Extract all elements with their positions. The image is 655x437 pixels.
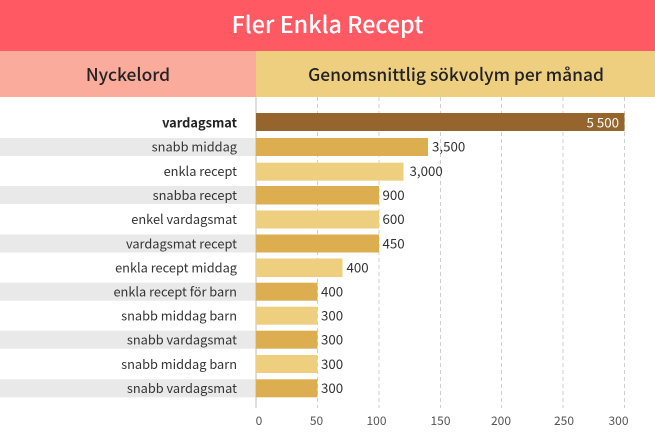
keyword labels: snabb vardagsmat xyxy=(127,378,237,397)
bar chart xyxy=(256,113,624,397)
column header: Genomsnittlig sökvolym per månad xyxy=(256,51,655,97)
column header: Nyckelord: Nyckelord xyxy=(86,62,170,87)
keyword labels: snabba recept xyxy=(153,185,237,204)
value labels: 5 500 xyxy=(586,112,619,132)
x-axis tick labels: 50 xyxy=(310,412,323,429)
keyword labels: snabb vardagsmat xyxy=(127,330,237,348)
keyword labels: snabb middag barn xyxy=(121,354,237,373)
value labels: 400 xyxy=(321,282,343,300)
value labels: 300 xyxy=(321,330,343,348)
value labels: 400 xyxy=(346,258,369,276)
x-axis tick labels: 200 xyxy=(491,412,511,429)
keyword row stripes xyxy=(0,138,256,397)
value labels: 450 xyxy=(382,234,405,252)
title banner xyxy=(0,0,655,51)
chart axis line xyxy=(255,97,257,408)
x-axis tick labels: 250 xyxy=(554,412,574,429)
value labels: 300 xyxy=(321,354,343,373)
x-axis tick labels: 100 xyxy=(367,412,387,429)
keyword labels: enkla recept middag xyxy=(115,258,238,276)
keyword labels: enkla recept xyxy=(164,161,237,180)
x-axis tick labels xyxy=(256,412,629,429)
value labels xyxy=(321,112,619,397)
value labels: 3,000 xyxy=(410,161,443,180)
value labels: 300 xyxy=(321,306,343,324)
value labels: 600 xyxy=(382,209,405,228)
keyword labels: snabb middag barn xyxy=(121,306,237,324)
x-axis tick labels: 300 xyxy=(609,412,629,429)
column header: Nyckelord xyxy=(0,51,256,97)
keyword labels: enkla recept för barn xyxy=(113,282,237,300)
keyword labels: vardagsmat recept xyxy=(126,234,237,252)
keyword labels: enkel vardagsmat xyxy=(131,209,237,228)
keyword labels xyxy=(113,112,238,397)
x-axis tick labels: 150 xyxy=(431,412,451,429)
value labels: 900 xyxy=(382,185,405,204)
x-axis tick labels: 0 xyxy=(256,412,263,429)
value labels: 300 xyxy=(321,378,343,397)
keyword labels: snabb middag xyxy=(152,136,238,156)
column header: Genomsnittlig sökvolym per månad: Genomsnittlig sökvolym per månad xyxy=(308,62,604,87)
keyword labels: vardagsmat xyxy=(162,112,238,132)
chart gridlines xyxy=(318,97,624,408)
value labels: 3,500 xyxy=(432,136,465,156)
title banner: Fler Enkla Recept xyxy=(232,6,423,40)
